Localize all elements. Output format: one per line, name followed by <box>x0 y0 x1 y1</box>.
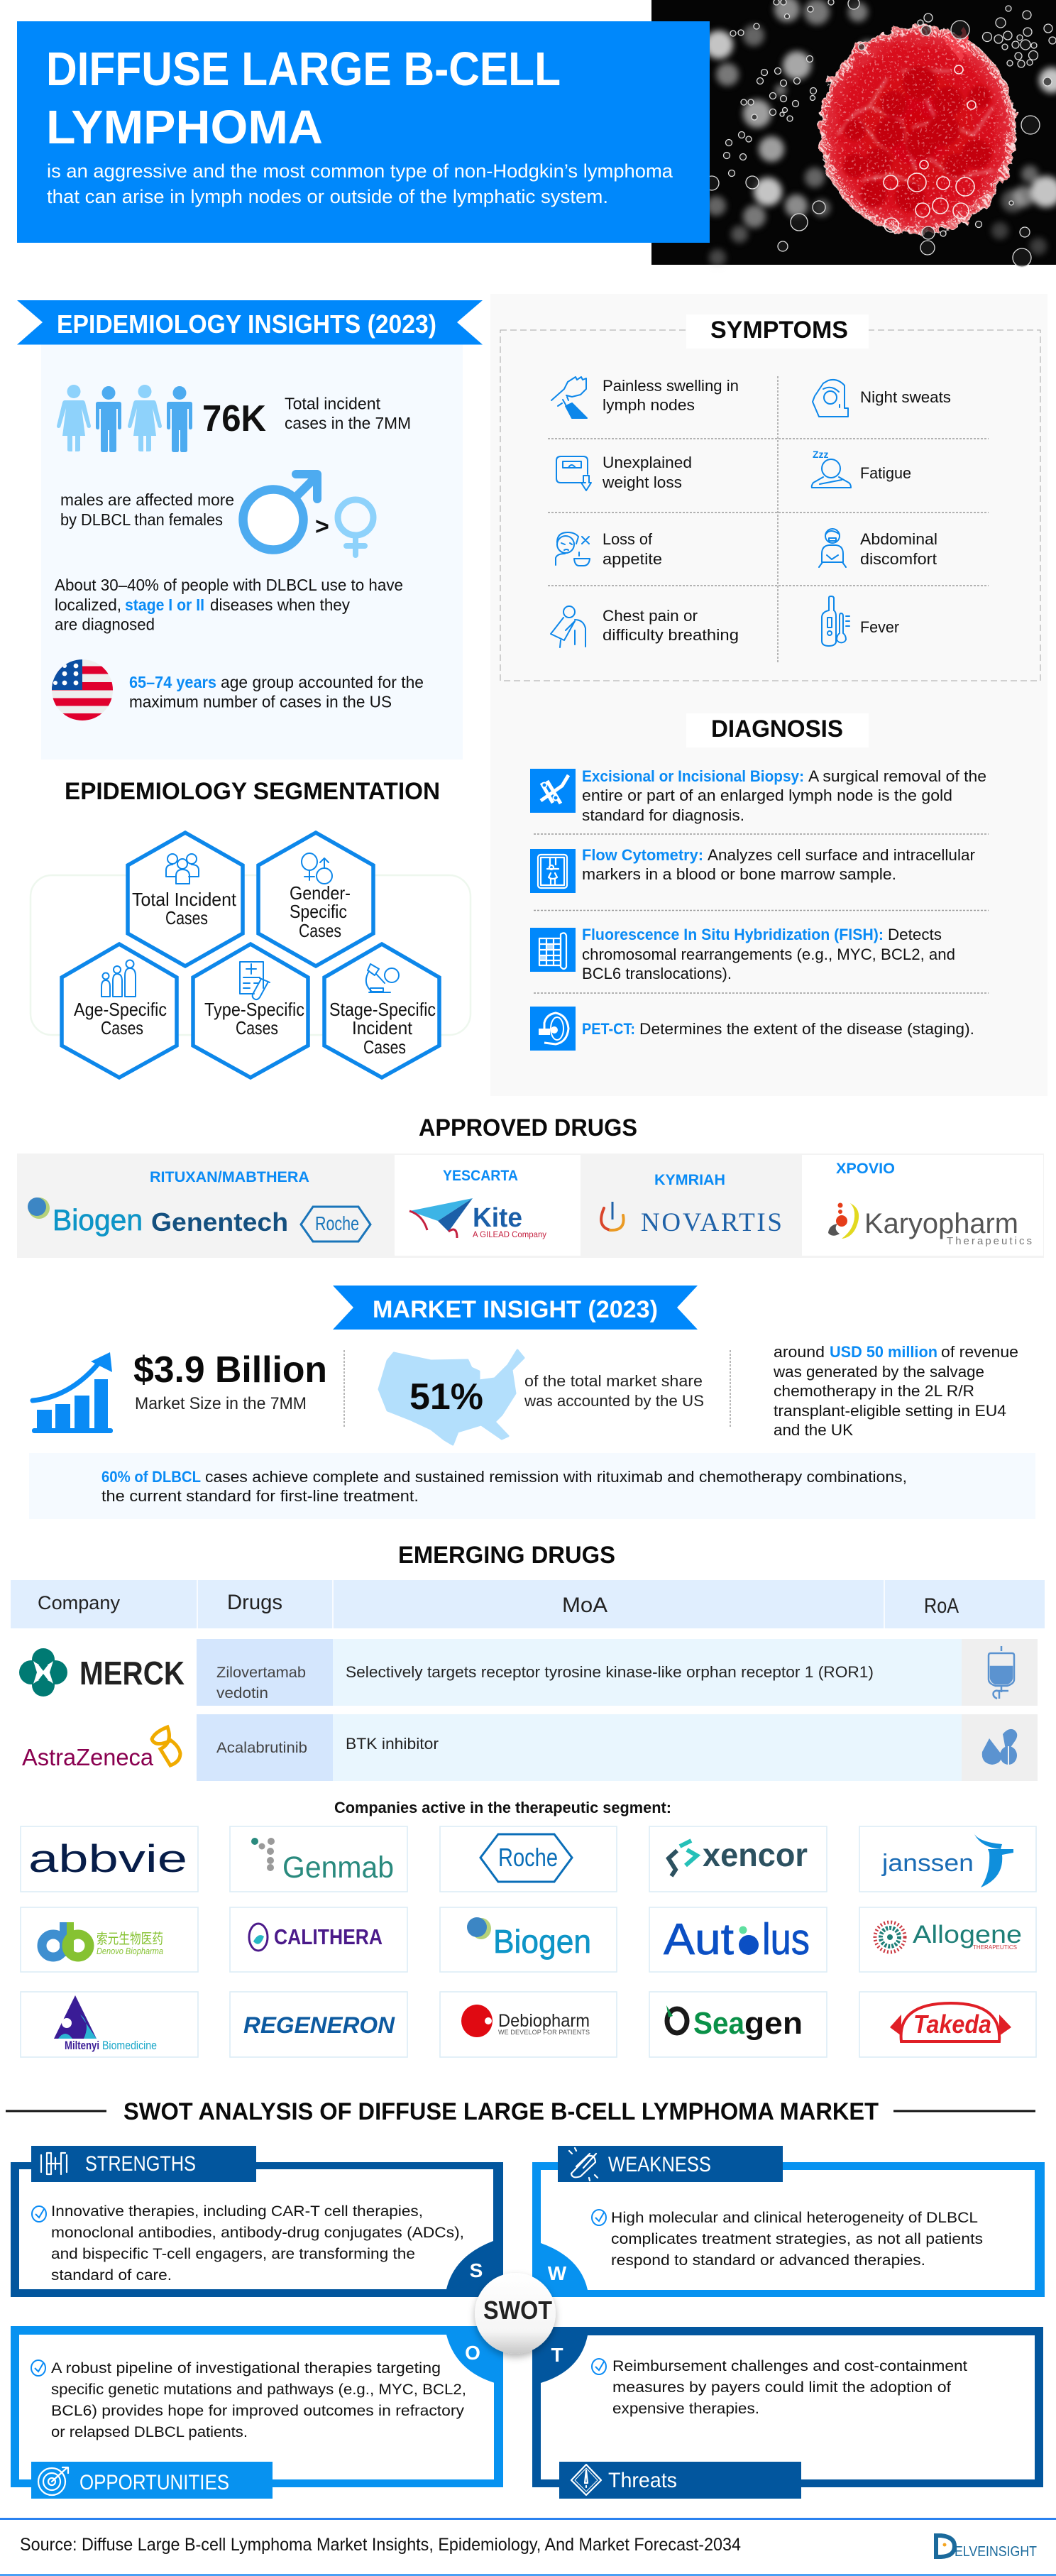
hexagon: stage-specific incident cases: Cases <box>363 1036 406 1058</box>
text: painless swelling: Painless swelling in <box>603 377 739 395</box>
text: male versus female: males are affected more <box>60 490 234 509</box>
text: salvage chemotherapy revenue: transplant-eligible setting in EU4 <box>774 1402 1006 1420</box>
heading: approved drugs: APPROVED DRUGS <box>419 1114 637 1141</box>
logo: Biogen <box>28 1197 143 1237</box>
logo card: Xencor: xencor <box>703 1836 808 1873</box>
hexagon: gender-specific cases: Gender- <box>290 882 351 904</box>
logo card: Takeda <box>859 1992 1036 2057</box>
logo card: Biogen <box>440 1907 617 1972</box>
title: DIFFUSE LARGE B-CELL <box>46 43 561 96</box>
corner letter: W: W <box>548 2262 567 2284</box>
chart icon: rising market bars <box>32 1352 113 1433</box>
panel: threats <box>532 2327 1043 2499</box>
logo card: Miltenyi: Biomedicine <box>102 2039 157 2052</box>
hexagon: gender-specific cases: Cases <box>299 920 341 941</box>
text: salvage chemotherapy revenue <box>773 1343 1018 1439</box>
logo card: Autolus: lus <box>762 1915 810 1964</box>
callout: remission <box>29 1453 1035 1519</box>
text: stage at diagnosis: About 30–40% of people with DLBCL use to have <box>55 576 403 594</box>
callout: remission: the current standard for first-line treatment. <box>101 1487 419 1505</box>
panel: strengths <box>11 2146 503 2297</box>
logo card: Debiopharm: Debiopharm <box>498 2011 590 2031</box>
icon: loss of appetite <box>556 532 590 566</box>
text: strengths <box>32 2203 464 2284</box>
text: male versus female <box>60 490 234 529</box>
text: abdominal discomfort: Abdominal <box>860 530 937 548</box>
table header: emerging drugs <box>11 1580 1045 1628</box>
panel: epidemiology insights background <box>41 344 463 760</box>
icon: PET-CT tile <box>530 1007 576 1051</box>
logo card: Regeneron: REGENERON <box>243 2012 395 2038</box>
heading: emerging drugs: EMERGING DRUGS <box>398 1542 615 1569</box>
logo card: Roche: Roche <box>498 1843 558 1872</box>
table header: emerging drugs: RoA <box>924 1594 959 1618</box>
hexagon: gender-specific cases <box>258 833 373 966</box>
logo card: Denovo Biopharma: 索元生物医药 <box>97 1931 163 1947</box>
tab: threats: Threats <box>608 2469 677 2492</box>
drug label: Yescarta: YESCARTA <box>443 1168 518 1184</box>
heading: epidemiology segmentation: EPIDEMIOLOGY SEGMENTATION <box>65 778 440 805</box>
tab: weakness: WEAKNESS <box>608 2153 711 2176</box>
drug label: Rituxan: RITUXAN/MABTHERA <box>150 1169 309 1185</box>
text: age group: age group accounted for the <box>221 673 424 691</box>
stat: 76K total incident cases <box>202 395 411 439</box>
text: night sweats: Night sweats <box>860 388 951 406</box>
text: chest pain <box>603 607 739 644</box>
table row: AstraZeneca: BTK inhibitor <box>346 1735 439 1753</box>
logo card: Roche <box>440 1826 617 1892</box>
logo card: Janssen: janssen <box>881 1850 974 1877</box>
hexagon: age-specific cases: Cases <box>101 1017 143 1038</box>
text: US market share: was accounted by the US <box>524 1392 704 1410</box>
logo card: Genmab <box>230 1826 407 1892</box>
logo card: Autolus: Aut <box>664 1915 734 1964</box>
logo card: Seagen: gen <box>744 2006 803 2041</box>
text: flow cytometry: Flow Cytometry: <box>582 846 703 864</box>
table row: Merck: Zilovertamab <box>216 1665 306 1681</box>
text: opportunities: BCL6) provides hope for improved outcomes in refractory <box>51 2403 465 2419</box>
text: loss of appetite: Loss of <box>603 530 653 548</box>
text: FISH: Fluorescence In Situ Hybridization (FISH): <box>582 926 884 943</box>
heading ribbon: market insight: MARKET INSIGHT (2023) <box>373 1296 658 1323</box>
text: opportunities: specific genetic mutations and pathways (e.g., MYC, BCL2, <box>51 2382 466 2398</box>
table header: emerging drugs: Drugs <box>227 1591 282 1614</box>
logo card: Autolus <box>649 1907 827 1972</box>
logo: Karyopharm: Karyopharm <box>864 1208 1018 1239</box>
logo card: Biogen: Biogen <box>493 1923 591 1960</box>
table header: emerging drugs: Company <box>38 1592 120 1613</box>
logo card: Genmab: Genmab <box>282 1851 394 1885</box>
hexagon: total incident cases: Cases <box>165 907 208 928</box>
text: chest pain: Chest pain or <box>603 607 698 625</box>
heading: diagnosis: DIAGNOSIS <box>711 716 843 742</box>
panel: weakness <box>532 2146 1045 2297</box>
icon: fatigue <box>812 459 851 488</box>
text: stage at diagnosis: diseases when they <box>210 596 350 614</box>
logo card: Calithera <box>230 1907 407 1972</box>
logo card: Takeda: Takeda <box>913 2010 991 2039</box>
text: weakness <box>592 2210 983 2269</box>
logo: Biogen: Biogen <box>53 1203 143 1237</box>
text: biopsy: A surgical removal of the <box>808 767 986 785</box>
corner letter: O: O <box>465 2342 480 2364</box>
hexagon: total incident cases <box>128 833 243 966</box>
text: age group: maximum number of cases in the US <box>129 693 392 711</box>
hexagon: total incident cases: Total Incident <box>132 889 237 910</box>
heading: companies active: Companies active in the therapeutic segment: <box>334 1799 671 1816</box>
icon: weight scale <box>556 456 591 490</box>
hexagon: gender-specific cases: Specific <box>290 901 347 922</box>
logo card: Miltenyi <box>21 1992 198 2057</box>
logo card: Regeneron <box>230 1992 407 2057</box>
logo card: Seagen: Sea <box>693 2006 744 2041</box>
text: opportunities: A robust pipeline of investigational therapies targeting <box>51 2360 441 2377</box>
logo: Novartis <box>601 1202 782 1237</box>
panel: opportunities <box>11 2326 503 2499</box>
text: biopsy: entire or part of an enlarged lymph node is the gold <box>582 786 952 804</box>
text: FISH: BCL6 translocations). <box>582 965 732 982</box>
icon: FISH tile <box>530 928 576 972</box>
text: FISH: Detects <box>888 926 942 943</box>
hexagon: stage-specific incident cases: Incident <box>352 1017 413 1038</box>
icon: gender symbols <box>302 853 332 884</box>
subtitle: that can arise in lymph nodes or outside of the lymphatic system. <box>47 186 608 207</box>
logo: Kite <box>409 1198 546 1239</box>
stat: 76K total incident cases: 76K <box>202 398 266 439</box>
tab: strengths <box>31 2146 256 2182</box>
table header: emerging drugs: MoA <box>562 1594 607 1617</box>
text: weight loss <box>602 454 692 491</box>
text: painless swelling: lymph nodes <box>603 396 695 414</box>
subtitle: is an aggressive and the most common type of non-Hodgkin’s lymphoma <box>47 160 673 182</box>
icon: IV bag <box>989 1646 1014 1699</box>
logo card: Calithera: CALITHERA <box>274 1924 383 1949</box>
text: abdominal discomfort <box>860 530 937 568</box>
tab: strengths: STRENGTHS <box>85 2152 196 2176</box>
heading: symptoms: SYMPTOMS <box>710 317 848 344</box>
footer <box>0 2518 1056 2576</box>
logo grid: companies <box>21 1826 1036 2057</box>
text: weakness: complicates treatment strategies, as not all patients <box>611 2231 983 2247</box>
text: threats: expensive therapies. <box>612 2401 759 2417</box>
icon: flow cytometry tile <box>530 849 576 893</box>
text: loss of appetite <box>603 530 662 568</box>
stat: 76K total incident cases: cases in the 7MM <box>285 414 411 432</box>
icon: abdominal discomfort <box>819 529 846 567</box>
text: strengths: standard of care. <box>51 2267 172 2284</box>
text: abdominal discomfort: discomfort <box>860 550 937 568</box>
hexagon: stage-specific incident cases: Stage-Specific <box>329 999 436 1020</box>
panel: symptoms <box>500 314 1040 681</box>
heading ribbon: epidemiology insights <box>17 300 483 345</box>
text: weight loss: Unexplained <box>603 454 692 471</box>
icon: group of people <box>166 854 199 884</box>
logo: Merck: MERCK <box>79 1655 185 1692</box>
hexagon: type-specific cases: Type-Specific <box>204 999 304 1020</box>
text: strengths: Innovative therapies, including CAR-T cell therapies, <box>51 2203 423 2220</box>
icon: male symbol greater than female symbol: > <box>315 513 329 540</box>
stat: market size: $3.9 Billion <box>133 1349 327 1391</box>
icon: pills <box>982 1729 1017 1765</box>
table row: Merck: vedotin <box>216 1685 268 1701</box>
source text: Source: Diffuse Large B-cell Lymphoma Market Insights, Epidemiology, And Market Forecast-2034 <box>20 2535 741 2555</box>
tab: weakness <box>558 2146 783 2182</box>
panel: diagnosis <box>530 713 989 1051</box>
icon: microscope <box>366 964 399 992</box>
drug label: Xpovio: XPOVIO <box>836 1161 895 1177</box>
stat: 76K total incident cases: Total incident <box>285 395 381 413</box>
text: male versus female: by DLBCL than females <box>60 510 223 529</box>
logo card: Seagen <box>649 1992 827 2057</box>
text: threats <box>592 2358 967 2417</box>
heading: SWOT analysis: SWOT ANALYSIS OF DIFFUSE LARGE B-CELL LYMPHOMA MARKET <box>123 2098 879 2125</box>
drug label: Kymriah: KYMRIAH <box>654 1172 725 1188</box>
text: biopsy: standard for diagnosis. <box>582 806 744 824</box>
logo card: Allogene: THERAPEUTICS <box>973 1944 1017 1951</box>
logo: Merck <box>19 1648 185 1697</box>
logo: Karyopharm: Therapeutics <box>947 1235 1032 1247</box>
heading ribbon: market insight <box>333 1286 698 1330</box>
text: PET-CT: PET-CT: <box>582 1020 635 1038</box>
icon: male symbol greater than female symbol <box>243 474 373 555</box>
text: stage at diagnosis <box>55 576 403 633</box>
logo: Roche <box>301 1207 370 1242</box>
logo: Roche: Roche <box>315 1212 359 1234</box>
text: salvage chemotherapy revenue: around <box>774 1343 825 1361</box>
hexagon: type-specific cases: Cases <box>236 1017 278 1038</box>
text: stage at diagnosis: are diagnosed <box>55 615 155 633</box>
subtitle <box>47 160 673 207</box>
icon: fever thermometer <box>822 596 849 646</box>
logo: Karyopharm <box>828 1202 1032 1247</box>
logo card: Allogene: Allogene <box>913 1921 1022 1949</box>
text: biopsy <box>582 767 986 824</box>
SWOT centre badge <box>475 2273 556 2354</box>
text: US market share: of the total market share <box>524 1372 703 1390</box>
panel: approved drugs strip <box>17 1153 1044 1258</box>
hexagon: age-specific cases <box>62 944 177 1078</box>
logo card: Miltenyi: Miltenyi <box>65 2039 99 2052</box>
text: opportunities: or relapsed DLBCL patients. <box>51 2424 248 2440</box>
text: opportunities <box>31 2360 466 2440</box>
table row: Merck <box>19 1639 1038 1706</box>
icon: US map with 51% share <box>379 1350 524 1445</box>
callout: remission: 60% of DLBCL <box>101 1468 201 1486</box>
text: fatigue: Fatigue <box>860 464 911 482</box>
tab: threats <box>559 2462 801 2499</box>
text: US market share <box>524 1372 704 1410</box>
icon: US flag <box>52 659 113 720</box>
text: salvage chemotherapy revenue: USD 50 million <box>830 1343 937 1361</box>
heading ribbon: epidemiology insights: EPIDEMIOLOGY INSIGHTS (2023) <box>57 309 436 339</box>
text: painless swelling <box>603 377 739 414</box>
icon: biopsy tile <box>530 769 576 813</box>
text: strengths: and bispecific T-cell engagers, are transforming the <box>51 2246 415 2262</box>
table row: AstraZeneca <box>22 1714 1038 1781</box>
text: age group <box>129 673 424 711</box>
text: FISH <box>582 926 955 982</box>
stat: market size <box>133 1349 327 1413</box>
corner letter: T: T <box>551 2344 563 2366</box>
text: biopsy: Excisional or Incisional Biopsy: <box>582 767 804 785</box>
icon: people of three ages <box>101 960 136 997</box>
callout: remission: cases achieve complete and sustained remission with rituximab and chemotherapy combinations, <box>205 1468 907 1486</box>
hexagon: type-specific cases <box>193 944 308 1078</box>
logo: Kite: Kite <box>473 1203 522 1233</box>
text: weight loss: weight loss <box>602 473 682 491</box>
text: strengths: monoclonal antibodies, antibody-drug conjugates (ADCs), <box>51 2225 464 2241</box>
hexagon: stage-specific incident cases <box>324 944 439 1078</box>
title: LYMPHOMA <box>46 101 323 154</box>
hexagon: age-specific cases: Age-Specific <box>74 999 167 1020</box>
logo card: AbbVie: abbvie <box>28 1836 187 1880</box>
text: stage at diagnosis: stage I or II <box>125 596 204 614</box>
logo: DelveInsight: ELVEINSIGHT <box>955 2544 1037 2560</box>
icon: medical record and test tube <box>240 962 270 999</box>
text: flow cytometry <box>582 846 975 883</box>
panel: segmentation backdrop <box>31 875 471 1035</box>
icon: US map with 51% share: 51% <box>409 1376 483 1418</box>
logo: Novartis: NOVARTIS <box>641 1208 782 1237</box>
text: FISH: chromosomal rearrangements (e.g., MYC, BCL2, and <box>582 946 955 963</box>
text: flow cytometry: markers in a blood or bone marrow sample. <box>582 865 896 883</box>
text: fever: Fever <box>860 618 899 636</box>
text: weakness: respond to standard or advanced therapies. <box>611 2252 925 2269</box>
logo card: Denovo Biopharma: Denovo Biopharma <box>97 1946 163 1956</box>
SWOT centre badge: SWOT <box>483 2296 552 2325</box>
logo card: Debiopharm: WE DEVELOP FOR PATIENTS <box>498 2029 590 2036</box>
logo card: Allogene <box>859 1907 1036 1972</box>
table row: Merck: Selectively targets receptor tyrosine kinase-like orphan receptor 1 (ROR1) <box>346 1663 874 1681</box>
logo card: AbbVie <box>21 1826 198 1892</box>
text: loss of appetite: appetite <box>603 550 662 568</box>
text: salvage chemotherapy revenue: of revenue <box>941 1343 1018 1361</box>
stat: market size: Market Size in the 7MM <box>135 1394 307 1413</box>
table row: AstraZeneca: Acalabrutinib <box>216 1740 307 1756</box>
text: threats: measures by payers could limit the adoption of <box>612 2379 951 2396</box>
logo: AstraZeneca <box>22 1727 180 1770</box>
icon label: sleeping Z: Zzz <box>813 449 829 460</box>
logo card: Debiopharm <box>440 1992 617 2057</box>
logo card: Denovo Biopharma <box>21 1907 198 1972</box>
logo: Kite: A GILEAD Company <box>473 1229 546 1239</box>
text: chest pain: difficulty breathing <box>603 626 739 644</box>
title <box>46 43 561 154</box>
text: PET-CT: Determines the extent of the disease (staging). <box>639 1020 974 1038</box>
icon: people group <box>57 385 192 452</box>
tab: opportunities: OPPORTUNITIES <box>79 2471 229 2494</box>
icon: painless swelling <box>551 377 587 418</box>
hero photo: lymphoma cell <box>651 0 1056 267</box>
logo: DelveInsight <box>936 2536 1037 2560</box>
corner letter: S: S <box>470 2259 483 2281</box>
text: age group: 65–74 years <box>129 673 216 691</box>
text: stage at diagnosis: localized, <box>55 596 121 614</box>
tab: opportunities <box>31 2462 273 2499</box>
text: flow cytometry: Analyzes cell surface and intracellular <box>708 846 975 864</box>
text: salvage chemotherapy revenue: was generated by the salvage <box>773 1363 984 1381</box>
panel: symptoms and diagnosis background <box>490 294 1047 1096</box>
text: weakness: High molecular and clinical heterogeneity of DLBCL <box>611 2210 978 2226</box>
text: threats: Reimbursement challenges and cost-containment <box>612 2358 967 2374</box>
hero title panel <box>17 21 710 243</box>
icon: night sweats <box>813 380 848 417</box>
logo card: Janssen <box>859 1826 1036 1892</box>
logo: AstraZeneca: AstraZeneca <box>22 1744 154 1770</box>
text: salvage chemotherapy revenue: and the UK <box>774 1421 853 1439</box>
logo card: Xencor <box>649 1826 827 1892</box>
text: salvage chemotherapy revenue: chemotherapy in the 2L R/R <box>774 1382 974 1400</box>
logo: Genentech: Genentech <box>151 1207 288 1237</box>
icon: chest pain <box>551 606 585 647</box>
